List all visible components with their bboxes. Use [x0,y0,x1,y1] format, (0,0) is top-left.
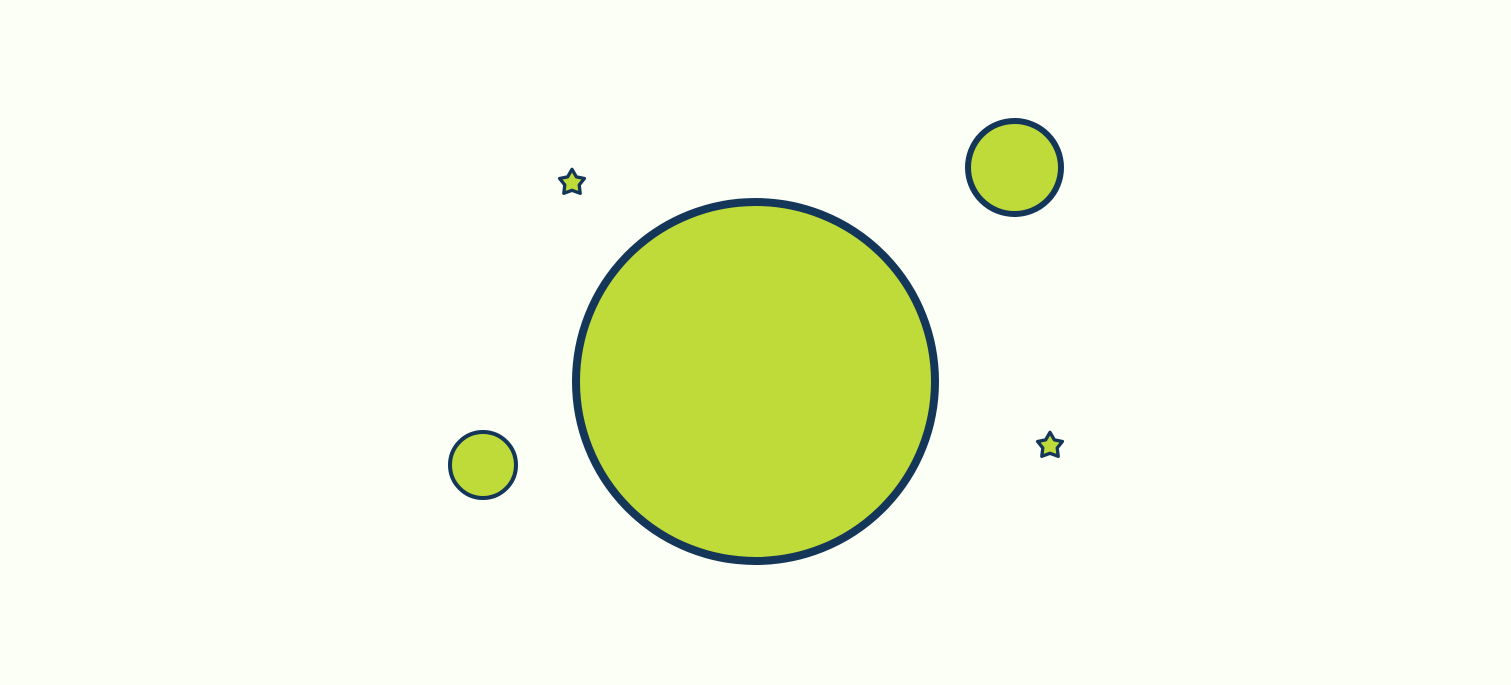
medium circle, upper right [968,121,1061,214]
icon: star, lower right [1038,432,1062,456]
icon: star, upper left [560,169,584,193]
small circle, lower left [450,432,516,498]
large central circle [576,202,935,561]
